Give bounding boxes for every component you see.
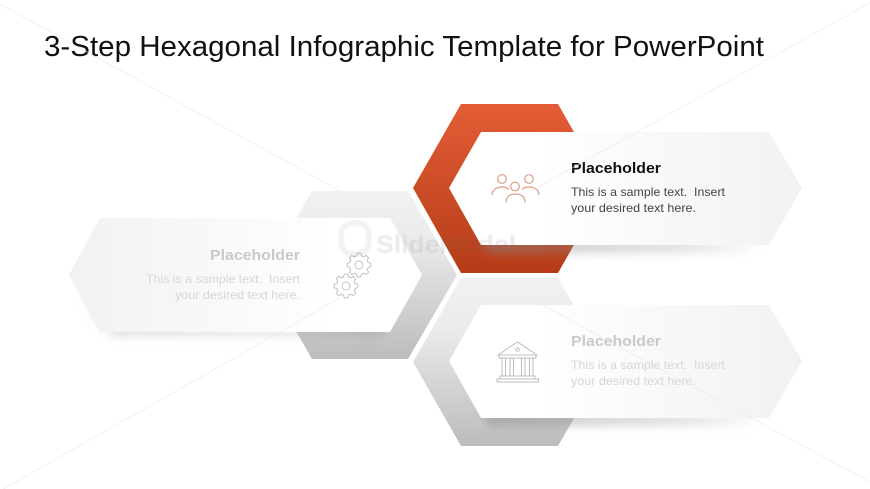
panel: left step	[69, 191, 457, 359]
left hexagon	[264, 191, 457, 359]
top heading: Placeholder	[571, 160, 661, 177]
bottom card shadow	[482, 413, 768, 426]
top body text	[571, 185, 726, 215]
bottom body text	[571, 358, 726, 388]
top body text: This is a sample text. Insert	[571, 185, 726, 199]
bottom body text: your desired text here.	[571, 374, 696, 388]
bottom body text: This is a sample text. Insert	[571, 358, 726, 372]
panel: top right step	[413, 104, 802, 273]
left body text: your desired text here.	[175, 288, 300, 302]
top card	[449, 132, 802, 245]
watermark logo	[341, 223, 369, 254]
top card shadow	[482, 240, 768, 253]
icon: people	[492, 175, 539, 202]
left body text: This is a sample text. Insert	[146, 272, 301, 286]
bottom card	[449, 305, 802, 418]
panel: bottom right step	[413, 278, 802, 446]
left heading: Placeholder	[210, 247, 300, 264]
left body text	[146, 272, 301, 302]
watermark text: SlideModel	[376, 231, 516, 259]
title: 3-Step Hexagonal Infographic Template for PowerPoint	[44, 31, 764, 63]
bottom hexagon	[413, 278, 606, 446]
left card shadow	[78, 290, 388, 336]
icon: gears	[334, 253, 371, 298]
left card	[69, 218, 422, 332]
red hexagon	[413, 104, 606, 273]
icon: bank building	[497, 342, 538, 382]
bottom heading: Placeholder	[571, 333, 661, 350]
top body text: your desired text here.	[571, 201, 696, 215]
